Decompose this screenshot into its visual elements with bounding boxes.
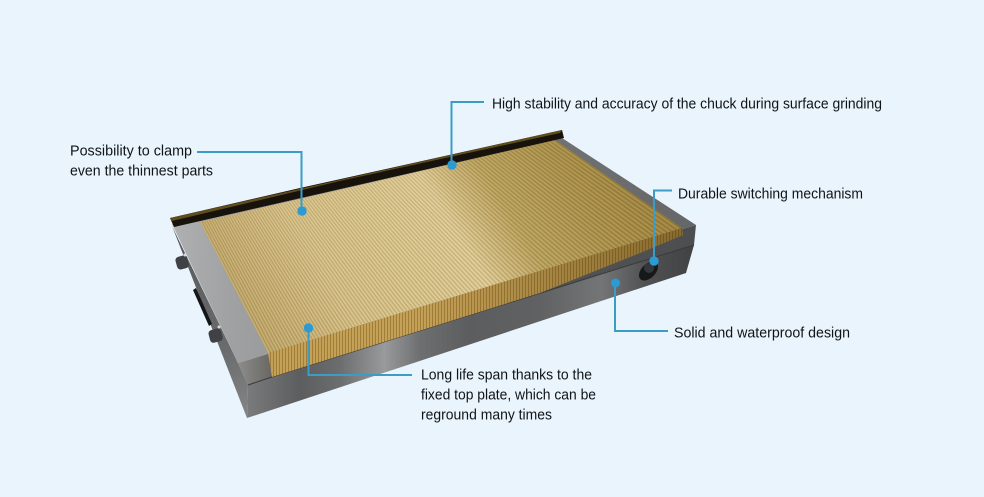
label: clamp: Possibility to clamp	[70, 142, 192, 160]
label: life span: fixed top plate, which can be	[421, 386, 596, 404]
upper side band	[238, 225, 696, 385]
icon: switch socket	[635, 258, 662, 284]
label: life span	[421, 366, 596, 424]
left side connector	[193, 288, 212, 326]
callout: waterproof line	[611, 278, 668, 331]
label: waterproof: Solid and waterproof design	[674, 324, 850, 342]
label: switching: Durable switching mechanism	[678, 186, 863, 202]
lower body front	[247, 245, 694, 418]
callout: life span line	[304, 323, 412, 375]
left side face	[172, 226, 248, 418]
callout: stability line	[447, 102, 484, 170]
grooved top plate	[200, 140, 682, 353]
magnetic chuck illustration with callouts	[70, 98, 882, 422]
label: clamp	[70, 142, 213, 180]
callout: clamp line	[197, 152, 307, 216]
top plate frame	[172, 138, 696, 363]
clamping rail	[170, 130, 564, 227]
label: life span: reground many times	[421, 406, 552, 424]
icon: left knob 2	[208, 326, 224, 344]
callout: switching line	[649, 190, 672, 266]
label: clamp: even the thinnest parts	[70, 162, 213, 180]
body seam	[248, 245, 694, 385]
icon: left knob 1	[175, 254, 190, 270]
label: life span: Long life span thanks to the	[421, 366, 592, 384]
grooved plate front face	[268, 228, 683, 377]
label: stability: High stability and accuracy of the chuck during surface grinding	[492, 96, 882, 112]
